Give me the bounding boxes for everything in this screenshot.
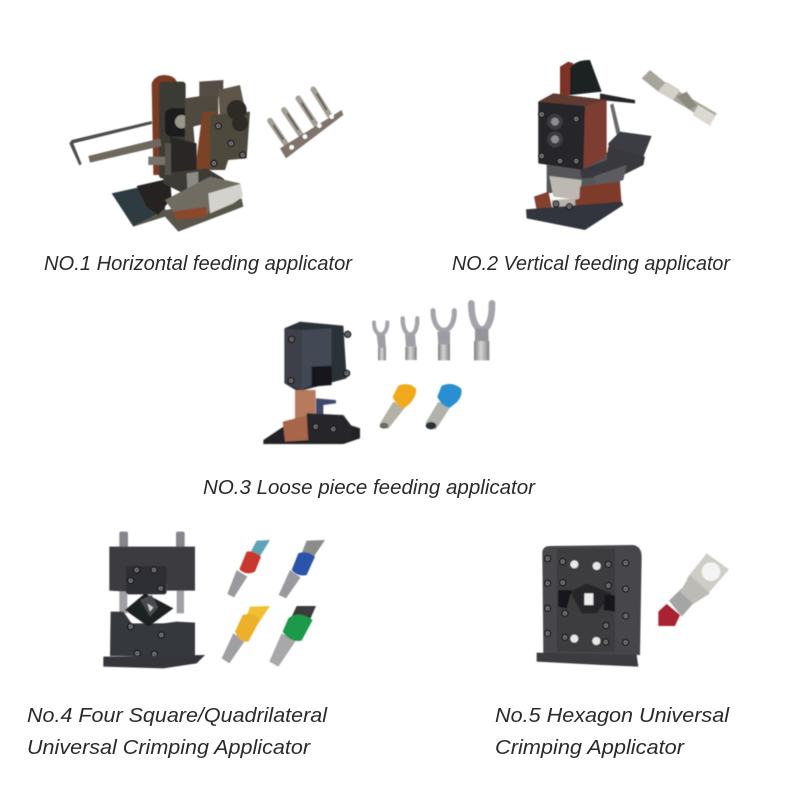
panel: No.5 hexagon universal crimping applicator — [495, 545, 730, 759]
image: vertical applicator machine — [526, 60, 717, 230]
icon: spade terminals — [374, 303, 492, 335]
icon: yellow ferrule — [222, 606, 270, 663]
panel: NO.2 vertical feeding applicator — [452, 60, 731, 275]
icon: yellow ferrule — [380, 384, 416, 429]
image: horizontal applicator machine — [69, 75, 343, 232]
icon: flag terminal — [642, 70, 717, 126]
caption: NO.3: NO.3 Loose piece feeding applicator — [203, 477, 536, 499]
panel: No.4 four square universal crimping applicator: Universal Crimping Applicator — [27, 737, 311, 759]
panel: NO.1 horizontal feeding applicator — [44, 75, 353, 275]
icon: blue wire ferrule — [279, 540, 325, 598]
image: hexagon applicator machine — [537, 545, 729, 667]
caption: NO.1: NO.1 Horizontal feeding applicator — [44, 253, 353, 275]
image: loose piece applicator machine — [263, 303, 492, 444]
caption: NO.2: NO.2 Vertical feeding applicator — [452, 253, 731, 275]
panel: No.4 four square universal crimping applicator — [27, 532, 328, 759]
icon: ring lug with red insulation — [658, 553, 729, 626]
caption: No.4: No.4 Four Square/Quadrilateral — [27, 705, 328, 727]
image: quadrilateral applicator machine — [103, 532, 325, 668]
icon: red ferrule — [227, 540, 270, 597]
panel: No.5 hexagon universal crimping applicator: Crimping Applicator — [495, 737, 685, 759]
panel: NO.3 loose piece feeding applicator — [203, 303, 536, 499]
icon: blue ferrule — [425, 384, 462, 430]
caption: No.5: No.5 Hexagon Universal — [495, 705, 730, 727]
icon: terminal strip — [270, 89, 343, 158]
icon: green ferrule — [269, 606, 316, 667]
